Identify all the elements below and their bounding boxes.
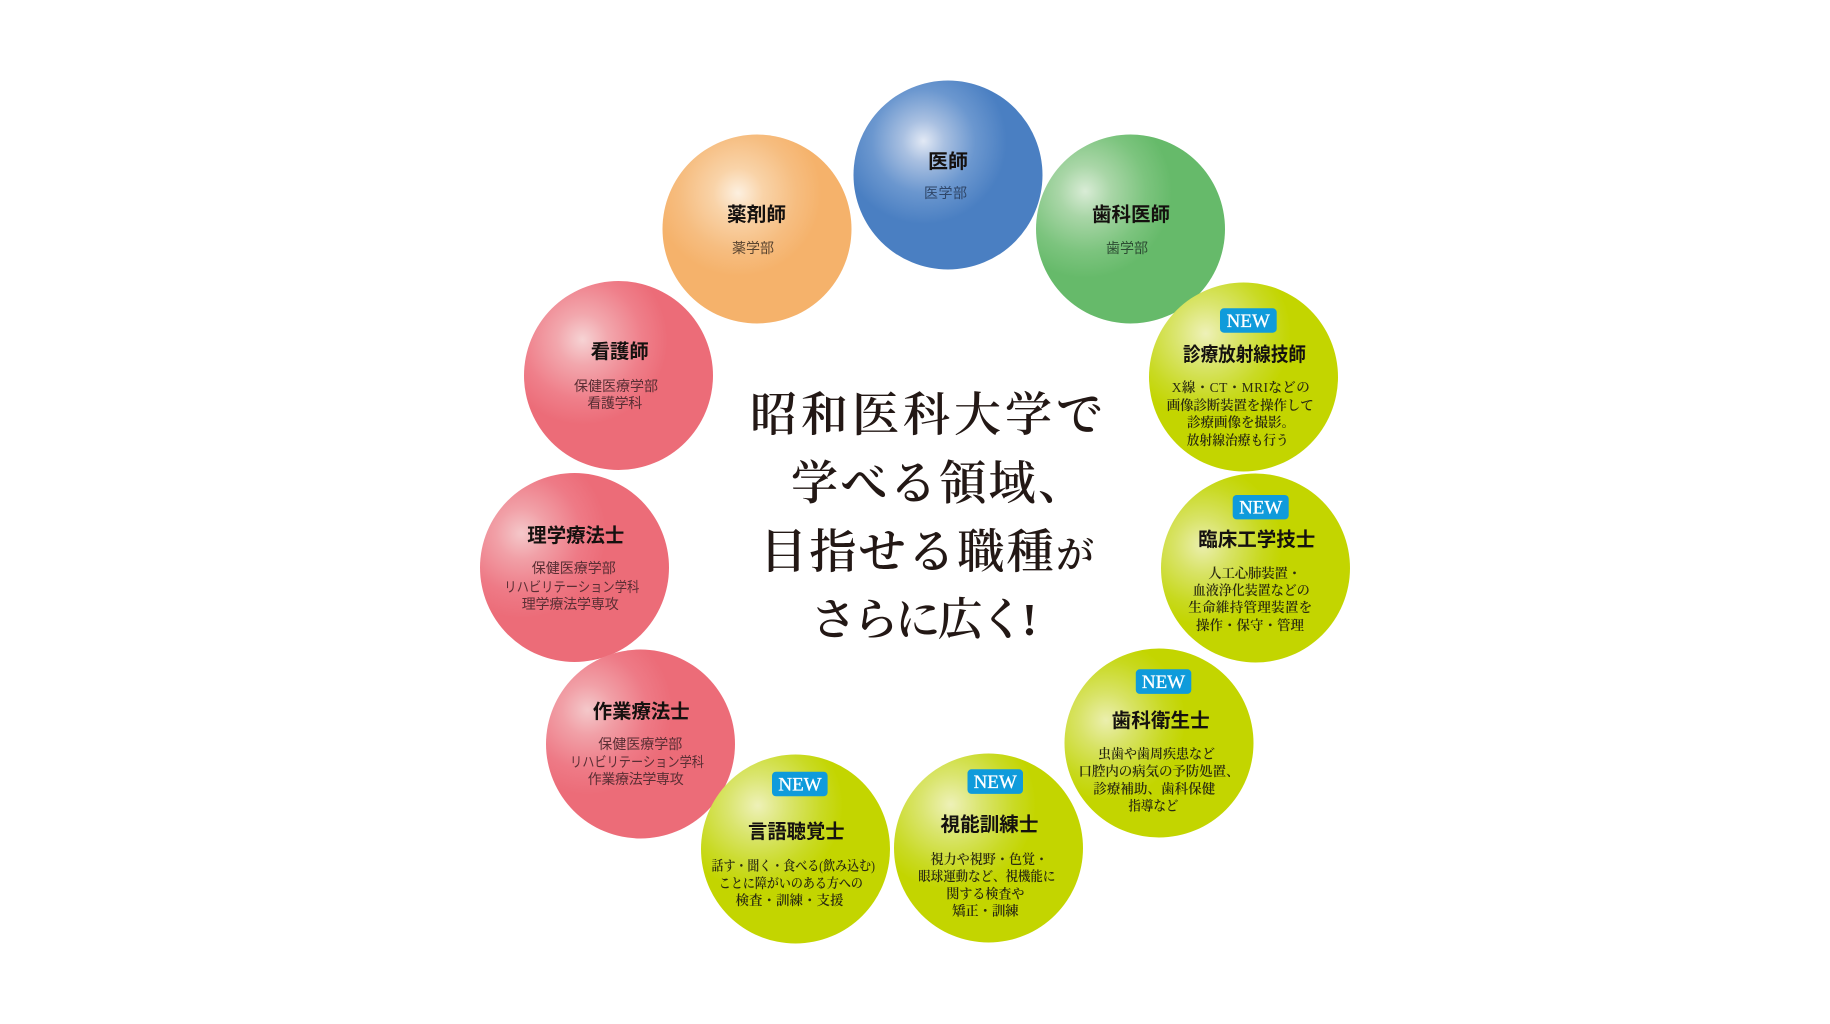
bubble: 作業療法士: 作業療法学専攻 bbox=[588, 771, 684, 787]
bubble: 歯科医師: 歯学部 bbox=[1106, 240, 1148, 256]
bubble: 作業療法士: 作業療法士 bbox=[593, 701, 690, 723]
badge: NEW: NEW bbox=[1227, 311, 1270, 332]
bubble: 看護師: 看護師 bbox=[591, 341, 649, 363]
bubble: 診療放射線技師: 画像診断装置を操作して bbox=[1167, 397, 1314, 413]
bubble: 診療放射線技師: X線・CT・MRIなどの bbox=[1172, 380, 1310, 395]
bubble: 視能訓練士: 矯正・訓練 bbox=[952, 902, 1019, 918]
bubble: 理学療法士: リハビリテーション学科 bbox=[504, 579, 639, 595]
bubble: 視能訓練士 bbox=[894, 754, 1083, 942]
bubble: 医師 bbox=[854, 80, 1042, 270]
bubble: 歯科衛生士 bbox=[1064, 648, 1254, 838]
badge: NEW bbox=[772, 772, 828, 796]
bubble: 看護師 bbox=[524, 281, 713, 470]
bubble: 看護師: 看護学科 bbox=[587, 395, 642, 411]
title bbox=[750, 390, 1103, 645]
bubble: 視能訓練士: 眼球運動など、視機能に bbox=[918, 868, 1055, 884]
bubble: 臨床工学技士: 臨床工学技士 bbox=[1198, 528, 1315, 551]
bubble: 薬剤師: 薬学部 bbox=[732, 240, 774, 256]
title: 目指せる職種が bbox=[760, 527, 1094, 579]
bubble: 診療放射線技師: 診療放射線技師 bbox=[1183, 344, 1306, 366]
bubble: 作業療法士 bbox=[546, 650, 735, 838]
bubble: 歯科医師: 歯科医師 bbox=[1092, 204, 1170, 226]
bubble: 言語聴覚士 bbox=[701, 754, 890, 944]
bubble: 歯科衛生士: 指導など bbox=[1128, 798, 1178, 814]
bubble: 看護師: 保健医療学部 bbox=[574, 378, 658, 394]
badge: NEW: NEW bbox=[778, 774, 822, 796]
bubble: 診療放射線技師 bbox=[1149, 282, 1338, 472]
badge: NEW: NEW bbox=[974, 772, 1017, 793]
bubble: 薬剤師: 薬剤師 bbox=[727, 204, 786, 226]
bubble: 歯科衛生士: 口腔内の病気の予防処置、 bbox=[1078, 763, 1240, 779]
badge: NEW bbox=[1233, 495, 1289, 519]
bubble: 作業療法士: リハビリテーション学科 bbox=[570, 754, 704, 770]
bubble: 臨床工学技士: 生命維持管理装置を bbox=[1188, 599, 1312, 615]
title: さらに広く! bbox=[811, 595, 1037, 645]
bubble: 理学療法士: 理学療法士 bbox=[527, 524, 624, 547]
bubble: 作業療法士: 保健医療学部 bbox=[598, 736, 682, 752]
bubble: 歯科衛生士: 虫歯や歯周疾患など bbox=[1098, 746, 1215, 762]
bubble: 診療放射線技師: 診療画像を撮影。 bbox=[1187, 414, 1295, 430]
bubble: 歯科衛生士: 診療補助、歯科保健 bbox=[1093, 780, 1216, 796]
bubble: 薬剤師 bbox=[662, 134, 852, 324]
badge: NEW bbox=[968, 769, 1023, 794]
badge: NEW: NEW bbox=[1239, 498, 1282, 518]
badge: NEW bbox=[1136, 669, 1191, 694]
bubble: 理学療法士: 保健医療学部 bbox=[532, 560, 616, 576]
bubble: 医師: 医学部 bbox=[924, 185, 967, 201]
bubble: 視能訓練士: 視力や視野・色覚・ bbox=[930, 851, 1048, 867]
bubble: 歯科衛生士: 歯科衛生士 bbox=[1112, 710, 1210, 732]
title: 学べる領域、 bbox=[791, 458, 1085, 510]
bubble: 臨床工学技士: 血液浄化装置などの bbox=[1193, 582, 1310, 598]
bubble: 歯科医師 bbox=[1036, 134, 1225, 324]
badge: NEW bbox=[1220, 308, 1277, 333]
bubble: 視能訓練士: 関する検査や bbox=[946, 886, 1024, 902]
bubble: 臨床工学技士: 操作・保守・管理 bbox=[1196, 617, 1304, 633]
bubble: 臨床工学技士 bbox=[1161, 474, 1350, 662]
bubble: 診療放射線技師: 放射線治療も行う bbox=[1187, 432, 1289, 448]
bubble: 医師: 医師 bbox=[928, 151, 968, 173]
badge: NEW: NEW bbox=[1142, 672, 1185, 693]
title: 昭和医科大学で bbox=[750, 390, 1103, 442]
bubble: 言語聴覚士: ことに障がいのある方への bbox=[719, 875, 863, 891]
bubble: 視能訓練士: 視能訓練士 bbox=[940, 814, 1038, 836]
bubble: 理学療法士 bbox=[480, 473, 669, 662]
bubble: 言語聴覚士: 検査・訓練・支援 bbox=[736, 892, 844, 908]
bubble: 言語聴覚士: 話す・聞く・食べる(飲み込む) bbox=[712, 858, 875, 874]
bubble: 臨床工学技士: 人工心肺装置・ bbox=[1208, 565, 1301, 581]
bubble: 理学療法士: 理学療法学専攻 bbox=[522, 596, 619, 612]
bubble: 言語聴覚士: 言語聴覚士 bbox=[748, 821, 845, 843]
